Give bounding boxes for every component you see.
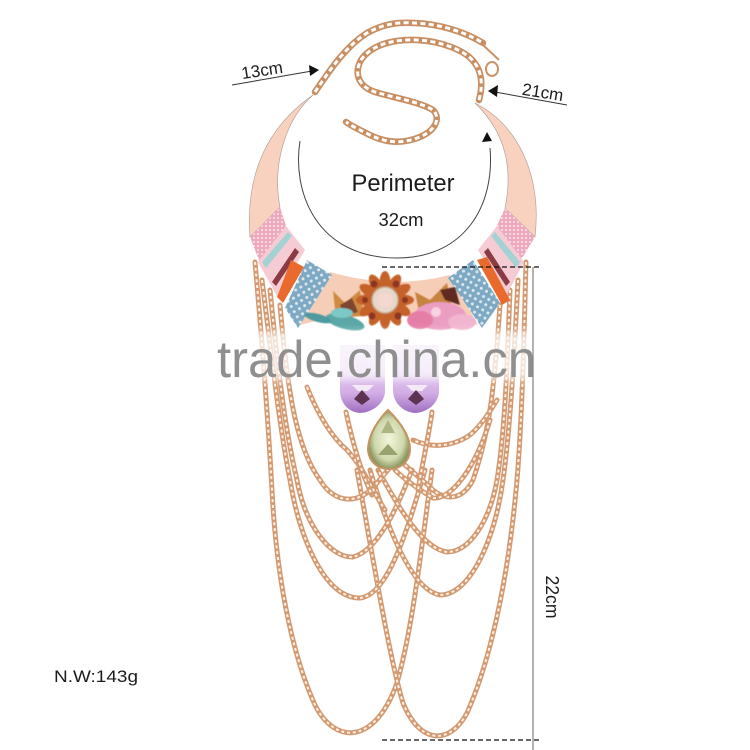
- gem: right rhinestone cluster: [407, 283, 476, 330]
- gem: left rhinestone cluster: [303, 290, 366, 334]
- watermark text: trade.china.cn: [217, 331, 536, 389]
- beaded panel: left: [250, 207, 332, 328]
- arrow: 13cm pointer: [232, 65, 319, 85]
- arrow: 21cm pointer: [488, 85, 567, 105]
- dimension: necklace drop line: [382, 267, 540, 750]
- icon: lobster clasp: [483, 45, 499, 76]
- collar: centre band: [300, 272, 478, 325]
- watermark band: [218, 332, 536, 380]
- arrow: perimeter arc: [299, 132, 492, 258]
- label: 32cm: 32cm: [378, 210, 424, 230]
- label: 21cm: 21cm: [521, 80, 565, 105]
- heading: Perimeter: Perimeter: [352, 170, 455, 197]
- label: 13cm: 13cm: [240, 58, 284, 83]
- collar: left rose gold crescent: [249, 95, 313, 237]
- beaded panel: right: [448, 208, 535, 328]
- gem: green teardrop pendant: [368, 410, 410, 469]
- label: net weight: N.W:143g: [54, 667, 138, 686]
- chains: hanging loops: [255, 262, 526, 736]
- gems: purple teardrops: [340, 345, 439, 413]
- gem: central flower with pearl: [356, 271, 414, 329]
- label: 22cm: 22cm: [542, 576, 562, 618]
- collar: right rose gold crescent: [475, 103, 536, 237]
- chain: clasp strap and extension: [315, 23, 499, 142]
